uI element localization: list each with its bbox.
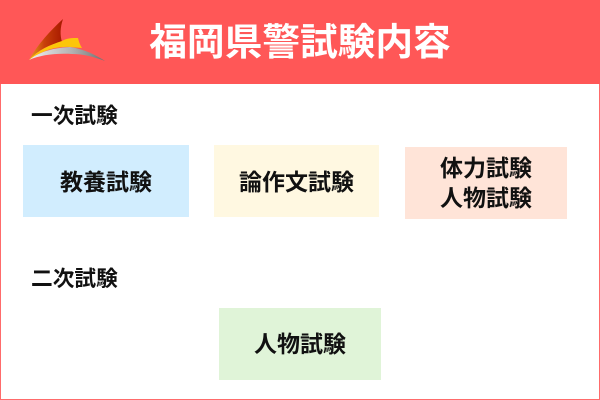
title: 福岡県警試験内容 (149, 21, 451, 63)
heading: first exam: 一次試験 (31, 103, 118, 128)
panel: general education exam (23, 145, 189, 217)
panel: physical and interview exam: 人物試験 (440, 185, 532, 211)
header band (0, 0, 600, 84)
heading: second exam: 二次試験 (31, 266, 118, 291)
panel: essay exam (214, 145, 379, 217)
panel: essay exam: 論作文試験 (239, 169, 354, 195)
panel: general education exam: 教養試験 (60, 169, 152, 195)
panel: interview exam: 人物試験 (254, 331, 346, 357)
panel: physical and interview exam: 体力試験 (440, 155, 532, 181)
icon: logo (29, 19, 105, 61)
panel: interview exam (219, 308, 381, 380)
panel: physical and interview exam (405, 147, 567, 219)
